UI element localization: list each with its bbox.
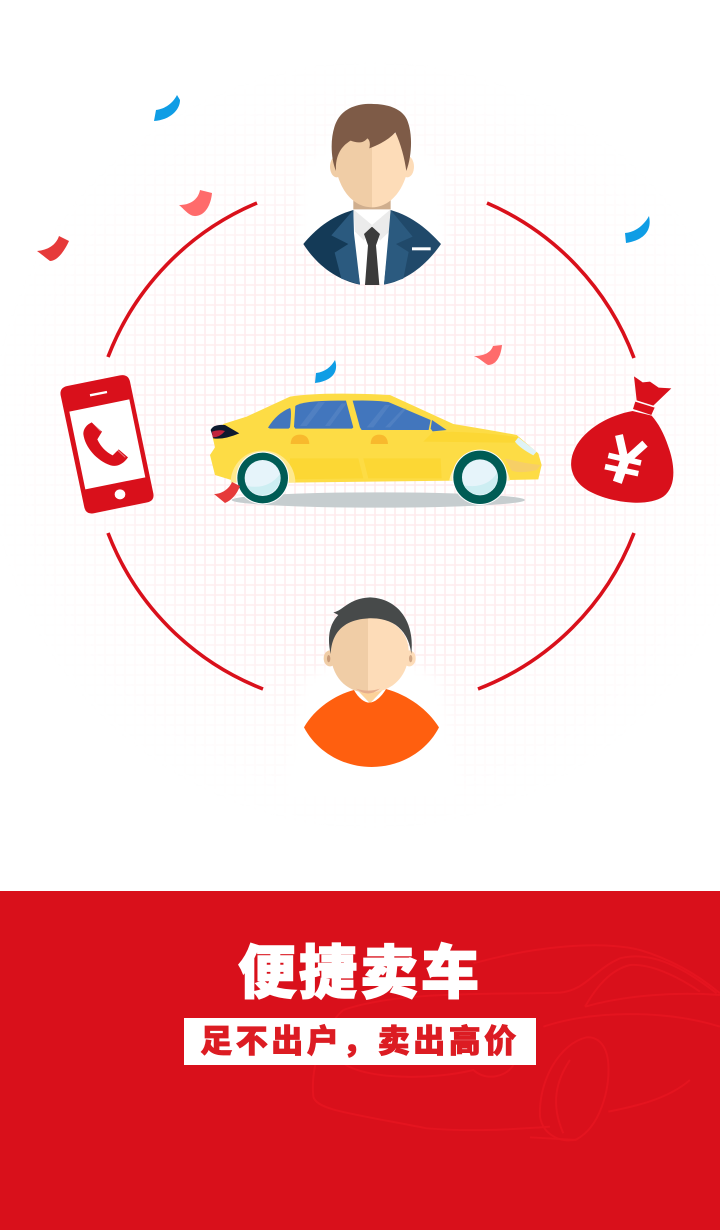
icon: smartphone (60, 375, 154, 514)
red ring arcs (108, 203, 634, 689)
wheels (231, 450, 295, 483)
icon: money bag with yen sign (571, 376, 673, 503)
icon: customer avatar (304, 597, 439, 767)
title: 便捷卖车 (238, 941, 482, 1006)
car shadow (232, 492, 525, 508)
icon: businessman avatar (303, 104, 441, 285)
illustration: yellow car (210, 394, 542, 508)
confetti pieces (37, 95, 650, 503)
faint car outline (312, 944, 720, 1141)
red footer band (0, 891, 720, 1230)
subtitle box: 足不出户，卖出高价 (200, 1023, 520, 1059)
background grid (103, 180, 647, 710)
subtitle box (184, 1018, 536, 1065)
